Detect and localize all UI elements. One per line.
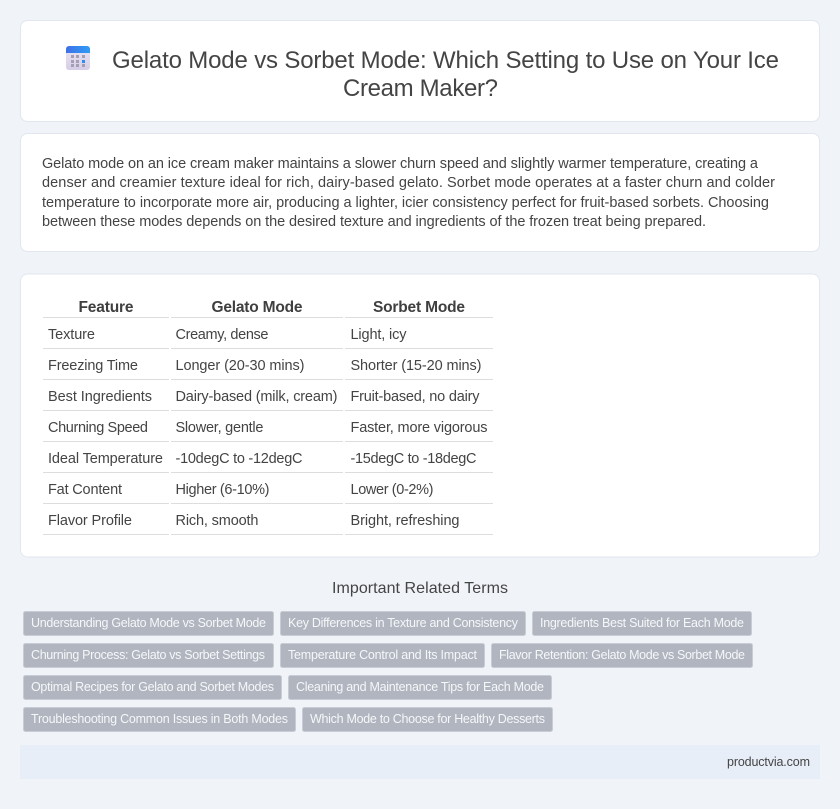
row: churning speed: Churning Speed bbox=[48, 420, 148, 436]
row: best ingredients: Best Ingredients bbox=[48, 389, 152, 405]
title: Gelato Mode vs Sorbet Mode: Which Setting to Use on Your Ice bbox=[112, 47, 779, 74]
row: texture bbox=[48, 327, 407, 343]
tag: Key Differences in Texture and Consistency bbox=[288, 616, 519, 630]
text block: description: temperature to incorporate more air, producing a lighter, icier consistency perfect for fruit-based sorbets. Choosing bbox=[42, 195, 769, 211]
panel: comparison table bbox=[20, 274, 820, 557]
row: freezing time: Freezing Time bbox=[48, 358, 138, 374]
tag: Churning Process: Gelato vs Sorbet Settings bbox=[31, 648, 265, 662]
text block: description: Gelato mode on an ice cream maker maintains a slower churn speed and slightly warmer temperature, creating a bbox=[42, 156, 759, 172]
text block: description: denser and creamier texture ideal for rich, dairy-based gelato. Sorbet mode operates at a faster churn and colder bbox=[42, 175, 775, 191]
tag: Ingredients Best Suited for Each Mode bbox=[540, 616, 744, 630]
row: fat content: Fat Content bbox=[48, 482, 122, 498]
text block: description bbox=[42, 156, 775, 230]
heading: important related terms: Important Related Terms bbox=[332, 580, 508, 597]
tag bbox=[492, 644, 752, 668]
tag: Cleaning and Maintenance Tips for Each Mode bbox=[296, 680, 544, 694]
tag bbox=[280, 612, 526, 636]
row: churning speed: Faster, more vigorous bbox=[350, 420, 488, 436]
row: ideal temperature: -10degC to -12degC bbox=[176, 451, 302, 467]
row: fat content: Higher (6-10%) bbox=[176, 482, 270, 498]
tag: Optimal Recipes for Gelato and Sorbet Modes bbox=[31, 680, 274, 694]
title bbox=[112, 47, 779, 102]
tag bbox=[532, 612, 752, 636]
row: ideal temperature: -15degC to -18degC bbox=[350, 451, 476, 467]
row: texture: Texture bbox=[48, 327, 95, 343]
table header: Sorbet Mode bbox=[373, 299, 465, 316]
icon: calendar grid bbox=[66, 46, 90, 70]
row: texture: Creamy, dense bbox=[176, 327, 268, 343]
tag bbox=[302, 708, 552, 732]
tag bbox=[24, 676, 282, 700]
tag: Flavor Retention: Gelato Mode vs Sorbet Mode bbox=[499, 648, 745, 662]
row: churning speed bbox=[48, 420, 488, 436]
tag bbox=[24, 612, 274, 636]
row: fat content bbox=[48, 482, 434, 498]
row: flavor profile: Flavor Profile bbox=[48, 513, 132, 529]
title: Cream Maker? bbox=[343, 75, 498, 102]
tag bbox=[24, 644, 274, 668]
row: texture: Light, icy bbox=[350, 327, 407, 343]
table rules bbox=[43, 318, 493, 534]
tag: Troubleshooting Common Issues in Both Modes bbox=[31, 712, 288, 726]
panel: description bbox=[20, 134, 820, 252]
tag: Understanding Gelato Mode vs Sorbet Mode bbox=[31, 616, 266, 630]
row: flavor profile bbox=[48, 513, 460, 529]
tag bbox=[288, 676, 552, 700]
row: best ingredients bbox=[48, 389, 480, 405]
row: churning speed: Slower, gentle bbox=[176, 420, 264, 436]
row: freezing time bbox=[48, 358, 482, 374]
row: best ingredients: Fruit-based, no dairy bbox=[350, 389, 480, 405]
footer bbox=[20, 745, 820, 779]
tag bbox=[280, 644, 484, 668]
table header: Feature bbox=[78, 299, 134, 316]
text block: description: between these modes depends on the desired texture and ingredients of the frozen treat being prepared. bbox=[42, 214, 706, 230]
tag: Temperature Control and Its Impact bbox=[288, 648, 478, 662]
table header bbox=[78, 299, 465, 316]
footer source: productvia.com bbox=[727, 755, 810, 769]
related terms tags bbox=[24, 612, 752, 732]
panel: header bbox=[20, 20, 820, 122]
row: freezing time: Longer (20-30 mins) bbox=[176, 358, 304, 374]
table header: Gelato Mode bbox=[212, 299, 303, 316]
row: ideal temperature: Ideal Temperature bbox=[48, 451, 163, 467]
tag: Which Mode to Choose for Healthy Desserts bbox=[310, 712, 545, 726]
row: flavor profile: Bright, refreshing bbox=[350, 513, 460, 529]
row: ideal temperature bbox=[48, 451, 476, 467]
row: best ingredients: Dairy-based (milk, cream) bbox=[176, 389, 338, 405]
row: freezing time: Shorter (15-20 mins) bbox=[350, 358, 482, 374]
tag bbox=[24, 708, 296, 732]
row: fat content: Lower (0-2%) bbox=[350, 482, 434, 498]
row: flavor profile: Rich, smooth bbox=[176, 513, 258, 529]
